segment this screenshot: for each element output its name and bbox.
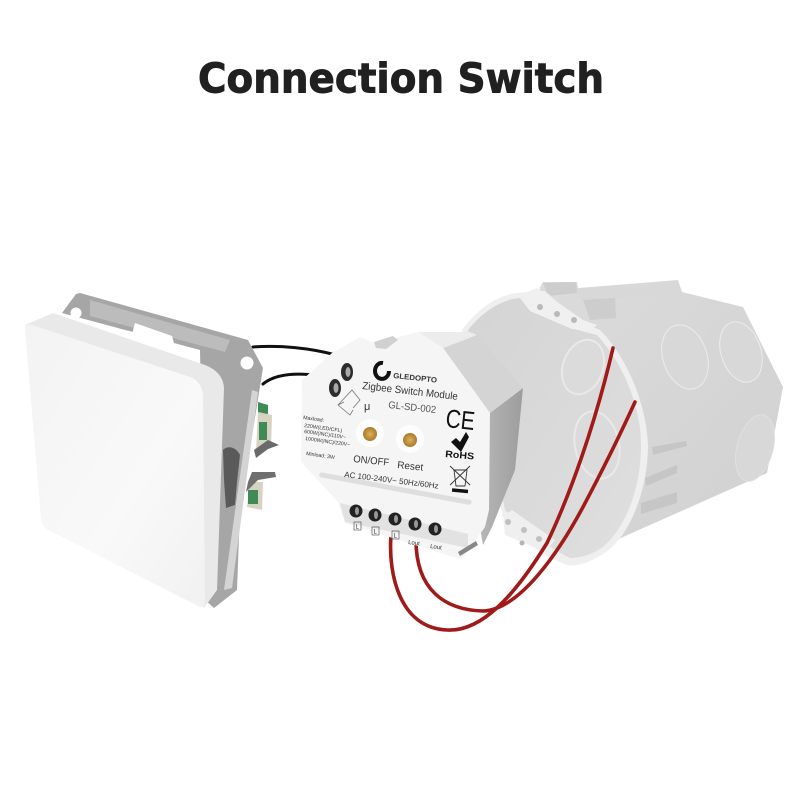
ON/OFF button: [356, 419, 384, 447]
terminals: [350, 504, 442, 536]
module top band: [418, 332, 477, 348]
box top flange with screw holes: [527, 288, 597, 331]
max load specs: 600W(INC)/110V~: [304, 429, 346, 441]
red wire two: [416, 402, 635, 611]
box top tabs: [543, 281, 682, 320]
terminal labels: L: [356, 524, 360, 530]
reset button: [396, 425, 424, 453]
junction box: [462, 280, 783, 565]
frame latch: [223, 447, 240, 508]
box outer body: [520, 280, 783, 565]
model number: GL-SD-002: [388, 400, 437, 416]
box outer knockouts: [654, 316, 781, 486]
title: Connection Switch: [198, 54, 604, 102]
product name: Zigbee Switch Module: [362, 380, 459, 403]
black wire two: [263, 374, 322, 384]
max load specs: Maxload:: [303, 415, 324, 424]
module slot: [319, 472, 472, 505]
max load specs: 1000W(INC)/220V~: [305, 436, 351, 448]
module terminal recess: [340, 503, 468, 548]
terminal labels: Lout: [430, 544, 442, 551]
terminal labels: L: [394, 534, 398, 540]
red wire one: [391, 348, 613, 630]
voltage label: AC 100-240V~ 50Hz/60Hz: [344, 470, 439, 491]
icon: WEEE bin: [450, 466, 470, 493]
box interior knockouts: [555, 334, 626, 483]
max load specs: Minload: 3W: [306, 451, 335, 461]
frame holes: [70, 308, 254, 370]
module bottom notch: [458, 541, 478, 556]
module top wedge: [443, 335, 523, 413]
switch plate side: [25, 313, 224, 608]
reset label: Reset: [397, 460, 424, 474]
frame highlight: [224, 390, 258, 590]
terminal labels: Lout: [408, 540, 420, 547]
terminal labels: L: [374, 530, 378, 536]
module side: [470, 388, 523, 545]
logo: GLEDOPTO: [393, 371, 438, 385]
icon: RoHS check: [451, 432, 469, 452]
wall switch: [25, 293, 279, 608]
max load specs: [303, 415, 351, 461]
terminal labels: [354, 522, 442, 551]
black wires: [253, 346, 336, 384]
box interior: [468, 298, 641, 558]
switch rear clips: [246, 402, 279, 510]
micro contact symbol: μ: [364, 401, 370, 413]
max load specs: 220W(LED/CFL): [304, 423, 343, 434]
module front face: [301, 332, 490, 559]
module clip tab: [374, 336, 398, 349]
switch module: [301, 332, 523, 559]
red wires: [391, 348, 635, 630]
logo: [375, 363, 438, 385]
CE mark: CE: [444, 403, 476, 436]
ON/OFF label: ON/OFF: [353, 454, 390, 469]
switch plate face: [25, 325, 205, 607]
box side ribs: [641, 441, 687, 514]
black wire one: [253, 346, 336, 355]
frame upper highlight: [90, 300, 230, 352]
box bottom flange with screw holes: [503, 510, 555, 552]
screw housing: [329, 363, 353, 397]
micro contact symbol: [338, 390, 370, 415]
switch metal frame: [62, 293, 263, 608]
box front rim: [462, 291, 648, 565]
RoHS label: RoHS: [445, 449, 475, 463]
